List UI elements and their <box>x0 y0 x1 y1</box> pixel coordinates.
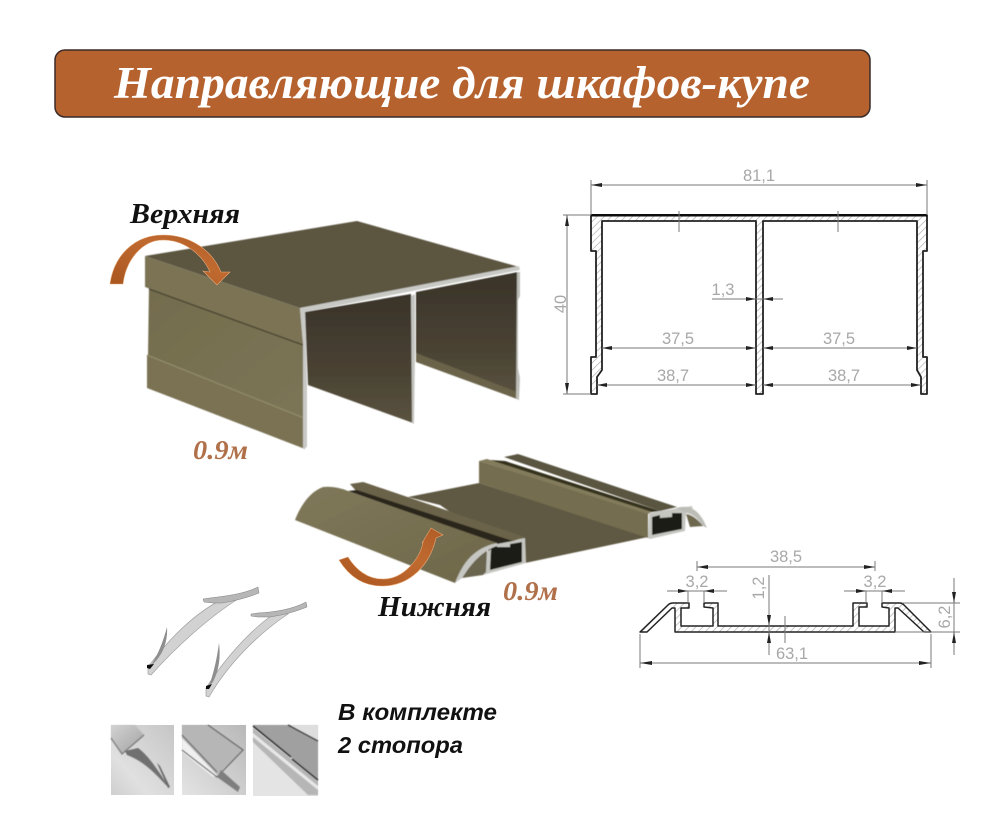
upper rail 3D product view <box>145 221 520 449</box>
thumbnail 1 <box>111 725 174 795</box>
label: upper rail: Верхняя <box>129 199 240 230</box>
arrow: lower rail <box>339 528 443 586</box>
outer side middle <box>148 285 305 419</box>
technical drawing: lower rail cross-section <box>640 548 960 668</box>
dimension 38,5: 38,5 <box>770 548 802 566</box>
near channel silver outline <box>483 538 526 575</box>
dimension 37,5: 37,5 <box>823 330 855 348</box>
label: lower rail: Нижняя <box>377 592 491 623</box>
far rib top <box>479 459 653 514</box>
outer side upper band <box>145 256 303 344</box>
title banner: Направляющие для шкафов-купе <box>113 58 810 108</box>
dimension 38,5 <box>697 548 875 571</box>
length label: lower rail: 0.9м <box>503 576 558 606</box>
centre ticks <box>679 211 838 232</box>
kit note: В комплекте <box>338 699 497 725</box>
kit note: 2 стопора <box>337 732 463 758</box>
dimension 1,2 <box>750 575 771 655</box>
dimension 40: 40 <box>552 295 570 313</box>
silver end edges <box>300 266 520 449</box>
stoppers: two curved metal pieces <box>147 587 307 697</box>
dimension 1,3: 1,3 <box>712 281 734 299</box>
outer side lower band <box>147 355 305 449</box>
dimension 81,1 <box>591 167 927 215</box>
near rail top <box>350 482 525 541</box>
thumbnail 2 <box>182 725 246 795</box>
profile outline <box>591 215 927 394</box>
far curved wing <box>676 507 707 528</box>
dimension 81,1: 81,1 <box>743 167 775 185</box>
dimension 37,5: 37,5 <box>662 330 694 348</box>
dimension 3,2 right: 3,2 <box>864 573 886 591</box>
stopper 1 <box>147 587 259 675</box>
dimension 1,3 <box>712 281 783 301</box>
dimension 40 <box>552 215 591 394</box>
underside of near wing <box>462 550 487 578</box>
interior cavities <box>305 294 413 423</box>
top face <box>145 221 519 308</box>
dimension 63,1: 63,1 <box>776 645 808 663</box>
dimension 38,7: 38,7 <box>828 367 860 385</box>
technical drawing: upper rail cross-section <box>552 167 927 394</box>
kit note <box>337 699 497 758</box>
dimension 3,2 left: 3,2 <box>686 573 708 591</box>
dimension 6,2: 6,2 <box>936 606 954 628</box>
dimension 38,7: 38,7 <box>657 367 689 385</box>
photo thumbnails of stopper installation <box>111 725 318 796</box>
near channel dark end <box>488 540 522 571</box>
dimension 3,2 right <box>844 573 905 603</box>
far rail groove <box>490 460 660 512</box>
floor <box>408 483 648 563</box>
dimension 3,2 left <box>667 573 727 603</box>
near rail groove <box>348 490 513 544</box>
far channel dark end <box>652 511 682 537</box>
stopper 2 <box>206 602 307 697</box>
arrow: upper rail <box>110 235 230 285</box>
far rib side <box>479 461 648 538</box>
length label: upper rail: 0.9м <box>193 435 248 465</box>
dimension 37,5 <box>602 330 917 350</box>
near rail inner wall <box>363 482 525 563</box>
title banner <box>55 50 870 117</box>
far rail top <box>504 454 677 511</box>
dimension 63,1 <box>640 616 931 668</box>
lower rail 3D product view <box>295 454 707 583</box>
dimension 1,2: 1,2 <box>750 577 768 599</box>
dimension 6,2 <box>895 578 960 655</box>
dimension 38,7 <box>597 367 921 387</box>
far channel silver outline <box>648 506 693 539</box>
profile outline <box>640 603 931 632</box>
thumbnail 3 <box>253 725 318 796</box>
curved left wing <box>295 487 497 583</box>
